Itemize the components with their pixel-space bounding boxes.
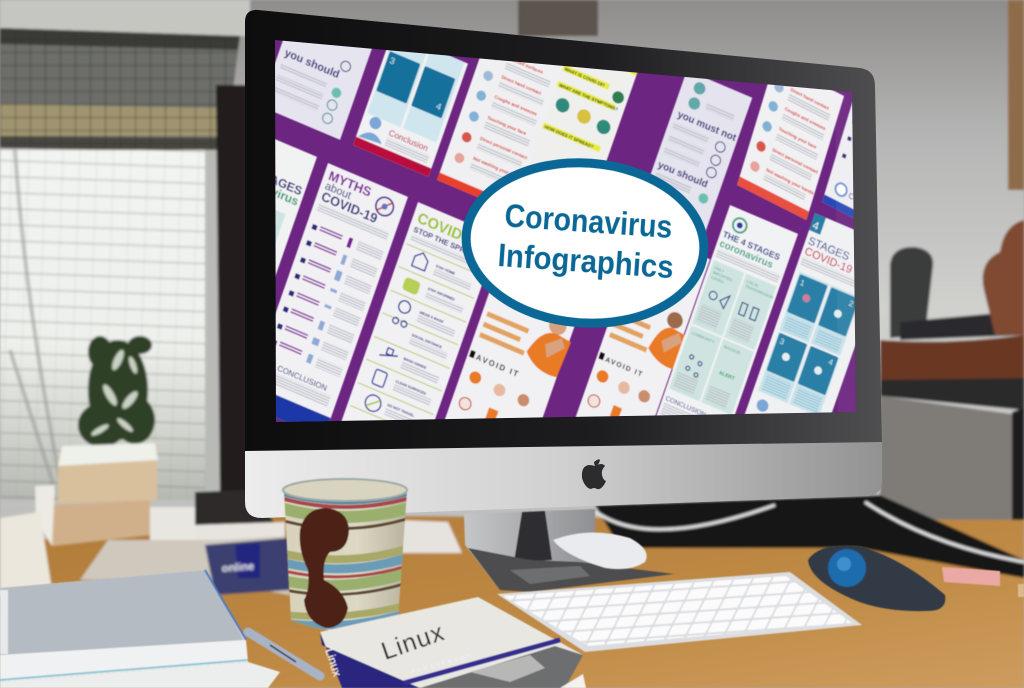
card: covid stop the spread: SOCIAL DISTANCE [411,333,443,350]
card: the 4 stages coronavirus: TRANSMISSION [744,283,774,300]
card: 4 stages covid-19: 2 [848,299,855,309]
card: red transmission list right: Not washing your hands [766,167,815,196]
card: myths about covid-19: MYTHS [327,168,374,200]
wall strip by window [205,150,220,490]
card: myths about covid-19: about [323,180,353,202]
card: 4 stages covid-19 [744,212,856,414]
monitor chin [245,442,882,518]
card: the 4 stages coronavirus: THE 4 STAGES [722,229,782,262]
card: teal stages with conclusion [352,50,469,178]
card: avoid it, right [575,258,710,417]
plant [78,336,155,447]
card: yellow what is covid: WHAT ARE THE SYMPTOMS? [558,82,619,112]
card: covid stop the spread: WEAR A MASK [419,310,444,324]
card: covid stop the spread: CLEAN SURFACES [395,379,427,396]
card: myths about covid-19 [276,162,409,422]
card: red transmission list right: Coughs and sneezes [784,106,827,132]
card: 4 stages covid-19: 1 [799,278,806,288]
notebook [0,570,280,688]
card: covid stop the spread: STOP THE SPREAD [412,225,482,261]
card: the 4 stages coronavirus: ALERT [718,370,735,382]
card: the 4 stages coronavirus [656,204,799,416]
white table patch [150,507,198,541]
title oval: Coronavirus Infographics [461,155,709,331]
phone [890,247,933,338]
card: covid stop the spread: STAY HOME [435,264,456,276]
card: red transmission list: Infected surfaces [507,55,544,75]
card: the 4 stages coronavirus: LOCAL [746,279,760,289]
wood strip [1008,0,1024,190]
Linux phrasebook: Linux [322,647,344,678]
card: avoid it, right: AVOID IT [604,356,644,379]
card: myths about covid-19: CONCLUSION [276,364,328,393]
trackball [808,545,945,611]
window [0,150,220,500]
card: stages coronavirus cropped: STAGES [255,166,304,198]
monitor bezel [245,10,882,452]
card: you must not: you must not [676,109,738,144]
card: 4 stages covid-19: COVID-19 [803,245,854,276]
card: far right blue: CONCLUSION [847,191,898,224]
mug handle [300,508,349,628]
card: myths about covid-19: COVID-19 [319,189,380,226]
card: 4 stages covid-19: 3 [778,337,786,347]
card: yellow what is covid: WHAT IS COVID-19? [564,66,606,88]
card: you should (top left): you should [283,47,341,81]
card: 4 stages covid-19: 4 [827,357,835,368]
card: the 4 stages coronavirus: IMPORTED [712,270,733,283]
card: teal stages with conclusion: 4 [435,101,443,112]
Linux phrasebook: Linux [378,618,448,666]
mug [280,479,410,631]
desk [0,515,1024,688]
shelf box [518,0,598,36]
person coughing [526,322,572,378]
card: the 4 stages coronavirus: coronavirus [718,238,775,271]
card: red transmission list right: Touching your face [778,126,817,150]
card: covid stop the spread: COVID [415,210,464,244]
title oval: Coronavirus Infographics: Coronavirus [503,197,674,245]
white cables [596,502,1024,562]
screen shading at right edge [835,90,856,412]
card: covid stop the spread: STAY INFORMED [427,287,456,302]
card: teal stages with conclusion: 3 [388,55,396,67]
white sheet [400,520,462,553]
card: you should (top left) [275,40,372,140]
card: red transmission list: Touching your face [487,115,527,136]
dark cables area [595,495,1024,578]
sticky notes [942,567,1024,597]
dark book [195,490,285,548]
card: avoid it, left [444,292,576,420]
card: the 4 stages coronavirus: ONLY [714,265,725,274]
pen [248,632,320,676]
card: stages coronavirus cropped [275,138,318,278]
Linux phrasebook [320,597,586,688]
card: red transmission list: Direct hand contact [501,74,542,96]
title oval: Coronavirus Infographics: Infographics [497,237,675,285]
card: covid stop the spread: WASH HANDS [403,357,427,370]
desk objects [0,479,1024,688]
monitor stand [464,509,674,592]
person icon [358,116,382,144]
card: red transmission list: Coughs and sneezes [494,94,538,117]
mouse [553,532,647,569]
card: teal stages with conclusion: Conclusion [388,127,430,153]
person icon [754,398,769,414]
person coughing [648,312,685,370]
online book [80,536,290,595]
window frame [216,85,250,495]
left papers [0,512,52,595]
card: covid stop the spread: DO NOT TRAVEL [387,403,415,418]
wood carving [983,220,1024,335]
card: covid stop the spread [340,202,482,421]
online book: online [221,561,255,575]
card: you must not [650,76,753,232]
card: red transmission list: Direct personal contact [479,136,528,161]
card: 4 stages covid-19: STAGES [807,235,851,263]
apple logo [582,459,606,489]
keyboard [497,572,862,652]
card: red transmission list right [736,84,845,220]
screen [275,40,856,422]
card: red transmission list: Not washing your hands [472,156,524,181]
card: the 4 stages coronavirus: COMMUNITY [691,330,716,345]
card: stages coronavirus cropped: coronavirus [233,169,301,209]
computer monitor [168,0,923,518]
card: yellow what is covid [530,66,638,165]
dark base [900,312,1024,340]
card: 4 stages covid-19: Conclusion [774,411,817,437]
card: avoid it, left: AVOID IT [475,353,521,379]
card: the 4 stages coronavirus: MASSIVE [723,344,741,356]
card: far right blue [822,101,854,218]
grey box [880,378,1024,556]
card: red transmission list [436,58,564,198]
leather chair [880,335,1024,382]
curtain [0,28,240,152]
Linux phrasebook: PHRASEBOOK [411,652,474,676]
no virus icon [374,196,395,218]
card: yellow what is covid: HOW DOES IT SPREAD? [544,124,594,150]
book stack [35,443,158,546]
card: the 4 stages coronavirus: CASES [710,274,725,285]
card: red transmission list right: Direct personal contact [772,147,819,175]
card: the 4 stages coronavirus: CONCLUSION [664,395,707,419]
card: red transmission list right: Direct hand contact [790,87,830,111]
card: you must not: you should [656,159,709,191]
card: 4 stages covid-19: 4 [811,219,820,233]
